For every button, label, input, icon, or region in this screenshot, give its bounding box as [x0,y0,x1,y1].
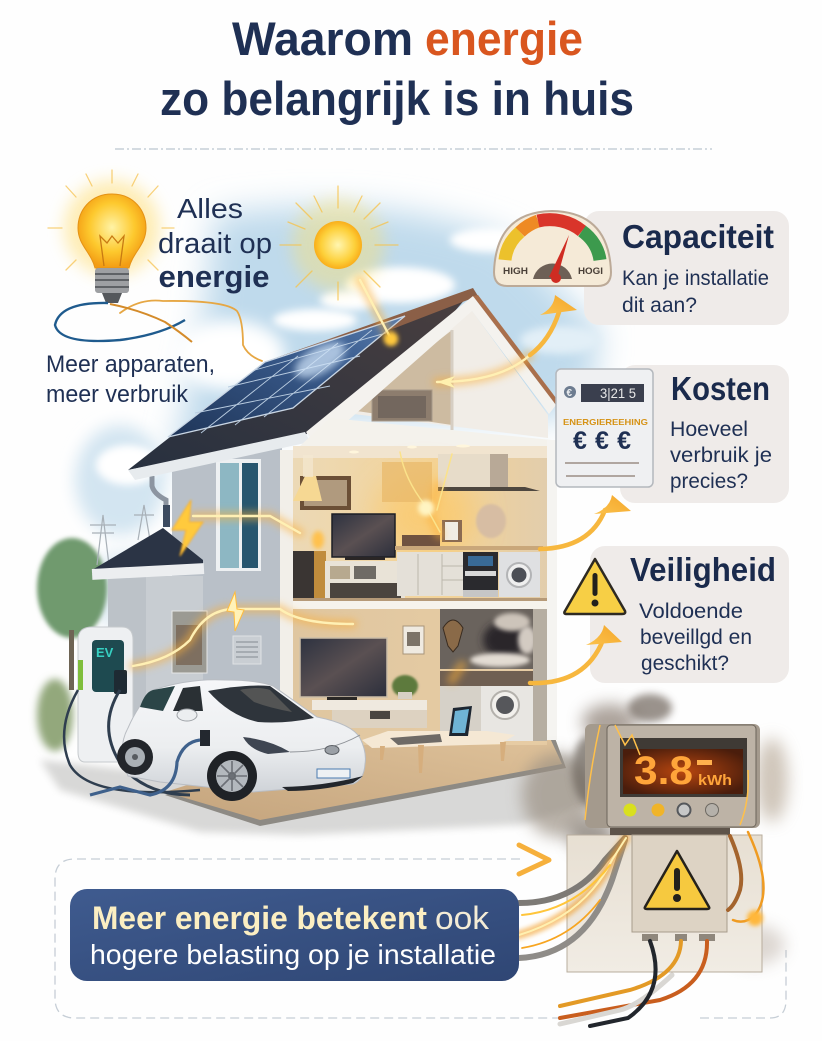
garage [92,528,204,716]
kitchen counter [395,546,543,550]
icon: warning triangle [645,851,709,909]
icon: energy bill: 3|21 5 [600,385,636,401]
floor band [293,600,547,609]
right cables [728,832,764,926]
attic [345,308,548,438]
tv stand [312,700,427,728]
heading: alles draait op energie: energie [158,259,270,294]
callout [70,889,519,981]
roof [128,288,478,480]
title: Waarom [232,12,413,65]
meter display [620,738,747,797]
gable trim [306,296,556,447]
gutter [152,476,166,526]
cupboard [293,551,321,601]
washing machine [481,686,533,741]
lower tv [300,638,387,700]
icon: gauge: HIGH [503,266,528,276]
callout: Meer energie betekent [92,900,427,936]
picture [403,626,424,654]
text [670,418,772,493]
text: geschikt? [641,652,729,675]
heading: alles draait op energie [158,193,272,294]
text: meer apparaten: Meer apparaten, [46,351,215,378]
ground [40,738,600,835]
text: meer apparaten [46,351,215,408]
table [362,706,515,773]
solar panel [168,316,405,437]
meter display: 3.8 [634,749,693,793]
heading: Veiligheid [630,551,776,588]
ev charger: EV [96,645,114,660]
meter box [585,724,760,828]
cooker hood [438,454,540,491]
text [622,267,769,317]
text: precies? [670,470,748,493]
title [160,12,634,125]
wall picture [300,476,351,510]
icon: gauge [494,211,611,286]
cabinets [397,552,463,596]
text: dit aan? [622,294,697,317]
vent [233,636,261,664]
electrical panel [519,724,764,1026]
dashed box [55,859,786,1018]
ceiling spots [349,444,470,454]
side cupboard [440,671,533,686]
washing machine [499,552,540,597]
text: Voldoende [639,600,743,623]
mirror [177,709,197,721]
title: energie [425,12,583,65]
heading: Kosten [671,370,770,407]
meter display: kWh [698,772,732,789]
heading: alles draait op energie: draait op [158,228,272,260]
lantern [443,620,463,652]
text: meer apparaten: meer verbruik [46,381,189,408]
smoke window [440,609,536,669]
callout: hogere belasting op je installatie [90,939,496,970]
power pylon [90,505,154,565]
plant [392,675,418,697]
sun [280,186,398,300]
glands [642,934,715,941]
panel: capaciteit [584,211,789,325]
white column [280,450,294,735]
energy flows [120,280,530,680]
wheels [117,739,257,801]
icon: energy bill: € [566,388,572,399]
side wall [172,440,282,700]
panel: kosten [620,365,789,503]
text: verbruik je [670,444,772,467]
icon: warning triangle [564,559,625,614]
junction box [632,835,727,932]
upper tv [332,514,395,560]
lightning bolts [172,332,455,631]
text: Hoeveel [670,418,748,441]
text: Kan je installatie [622,267,769,290]
wall plate [567,835,762,972]
ev charger [64,627,200,795]
icon: energy bill: ENERGIEREEHING [563,417,648,427]
icon: energy bill: €€€ [573,427,631,455]
text [639,600,752,675]
tv console [325,561,405,599]
kitchen items [402,504,506,546]
side window [216,459,261,571]
icon: gauge: HOGI [578,266,603,276]
house [64,288,557,801]
arrow: chevron [519,845,549,874]
panel: veiligheid [590,546,789,683]
oven [463,552,498,597]
windows [140,686,175,711]
heading: Capaciteit [622,218,774,255]
tablet [449,706,472,736]
smoke [522,694,788,965]
lower room [293,609,547,773]
meter buttons [624,804,718,816]
car [90,680,365,801]
cables down [560,941,707,1026]
upper room [293,444,547,601]
icon: light bulb [48,170,192,342]
title: zo belangrijk is in huis [160,72,634,125]
icon: energy bill [556,369,653,487]
charge port and cable [200,730,210,746]
callout: ook [435,900,490,936]
heading: alles draait op energie: Alles [177,193,243,224]
sky background [75,207,600,630]
cables from left [519,838,626,958]
sparks [585,725,748,825]
intro: light bulb [46,170,272,408]
headlight [243,737,290,754]
tree [37,538,107,751]
text: beveillgd en [640,626,752,649]
bumper [282,776,363,791]
arrows [530,295,631,683]
floor lamp [293,455,322,501]
lower window [172,611,207,673]
